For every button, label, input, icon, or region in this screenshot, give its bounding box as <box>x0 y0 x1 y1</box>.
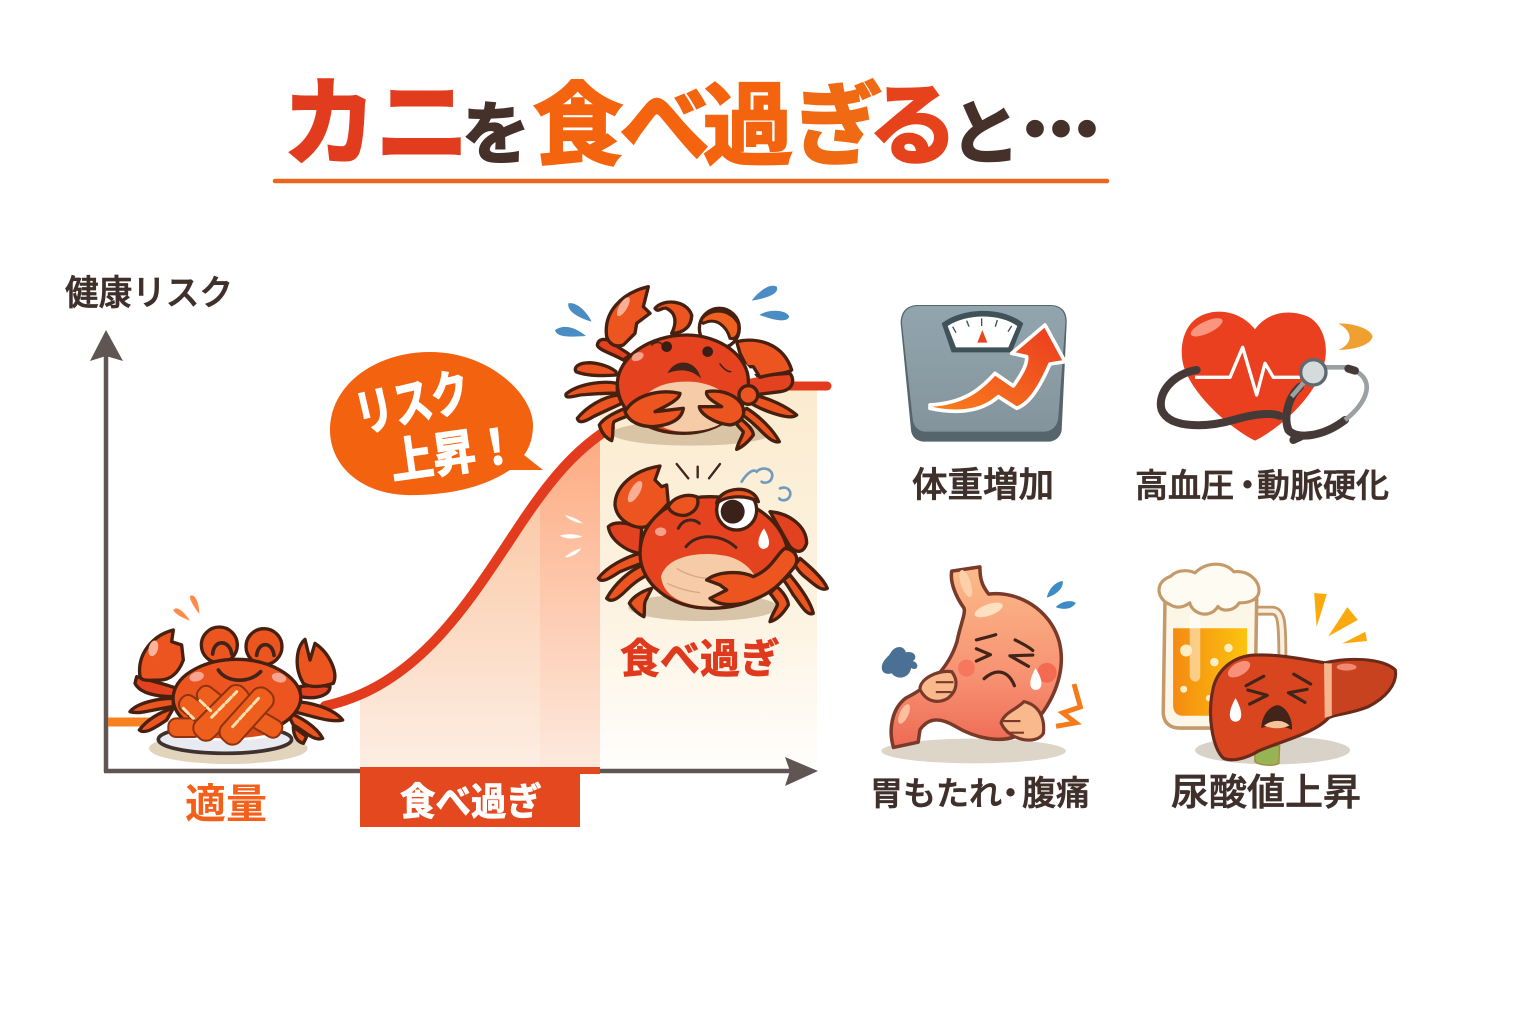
chart: risk curve <box>65 274 827 827</box>
gallbladder <box>1255 746 1280 765</box>
title underline <box>275 179 1107 183</box>
title: カニ <box>283 71 469 178</box>
callout: risk rising: リスク <box>350 363 476 444</box>
title: … <box>1022 69 1100 181</box>
flat low risk line <box>108 718 150 726</box>
title: を <box>462 97 530 173</box>
title: る <box>868 77 958 177</box>
y axis label: 健康リスク <box>65 274 233 313</box>
overeating tag on axis: 食べ過ぎ <box>400 782 542 824</box>
x axis <box>104 757 818 786</box>
overeating label: 食べ過ぎ <box>620 636 780 682</box>
label: hypertension and arteriosclerosis: 高血圧 <box>1135 467 1234 504</box>
label: hypertension and arteriosclerosis: ・ <box>1231 467 1264 504</box>
icon: sweat <box>1047 581 1076 609</box>
label: heavy stomach and abdominal pain: ・ <box>994 775 1027 812</box>
icon: pain marks <box>677 464 720 478</box>
crab: in pain, holding belly <box>560 464 827 622</box>
label: heavy stomach and abdominal pain: 腹痛 <box>1022 775 1090 813</box>
crab: worried on top of curve <box>555 286 797 449</box>
title <box>283 69 1100 181</box>
icon: sweat drops <box>555 286 789 337</box>
title: 食べ過 <box>533 77 793 177</box>
curve plateau <box>790 382 827 390</box>
icon: weight scale with rising arrow <box>901 305 1067 442</box>
crab: happy with plate <box>130 595 343 764</box>
icon: pain zigzag <box>1056 684 1080 726</box>
y axis <box>90 330 123 772</box>
label: hypertension and arteriosclerosis: 動脈硬化 <box>1257 467 1389 504</box>
icon: alert rays <box>1314 593 1367 643</box>
label: weight gain: 体重増加 <box>912 466 1054 505</box>
icon: heart with stethoscope <box>1161 312 1373 441</box>
icon: stomach in pain <box>881 567 1080 763</box>
label: elevated uric acid: 尿酸値上昇 <box>1171 772 1361 813</box>
title: と <box>950 95 1020 173</box>
moderate band and cream zone <box>360 390 817 770</box>
curve <box>325 428 610 706</box>
callout: risk rising <box>330 352 543 495</box>
icon: steam puffs <box>742 469 790 500</box>
moderate label: 適量 <box>185 781 267 827</box>
icon: beer mug and sad liver <box>1159 564 1396 765</box>
icon: gas puff <box>882 647 917 678</box>
callout: risk rising: 上昇！ <box>387 420 521 490</box>
label: heavy stomach and abdominal pain: 胃もたれ <box>870 775 1002 812</box>
title: ぎ <box>793 77 883 177</box>
overeating tag on axis <box>360 767 600 827</box>
